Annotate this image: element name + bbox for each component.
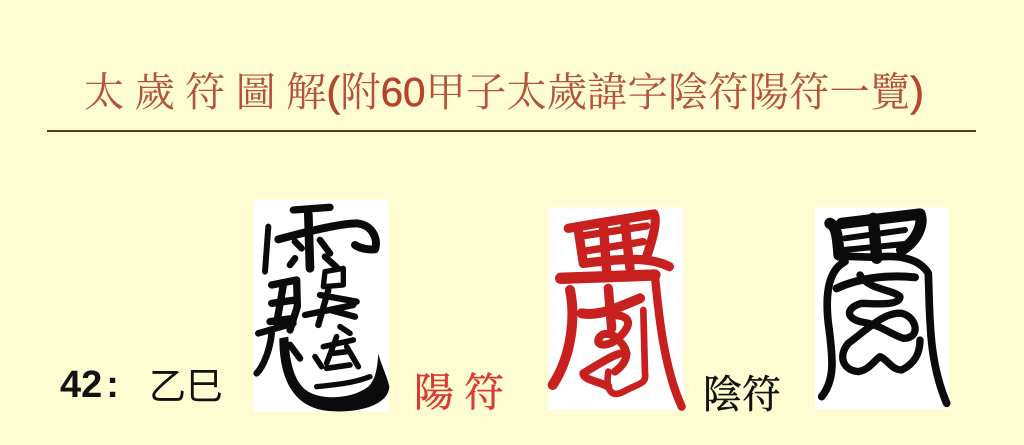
number label 42: 42: xyxy=(60,364,119,406)
yin talisman label: 陰符 xyxy=(703,374,781,417)
talisman image: red yang xyxy=(548,207,683,410)
title: 太 歲 符 圖 解(附60甲子太歲諱字陰符陽符一覽) xyxy=(84,68,924,115)
talisman image: black taisui xyxy=(253,199,389,412)
talisman image: black yin xyxy=(815,207,949,409)
stem-branch label: 乙巳 xyxy=(149,356,223,410)
title rule xyxy=(47,130,976,132)
thick base sweep xyxy=(279,337,389,411)
yang talisman label: 陽 符 xyxy=(414,370,504,415)
